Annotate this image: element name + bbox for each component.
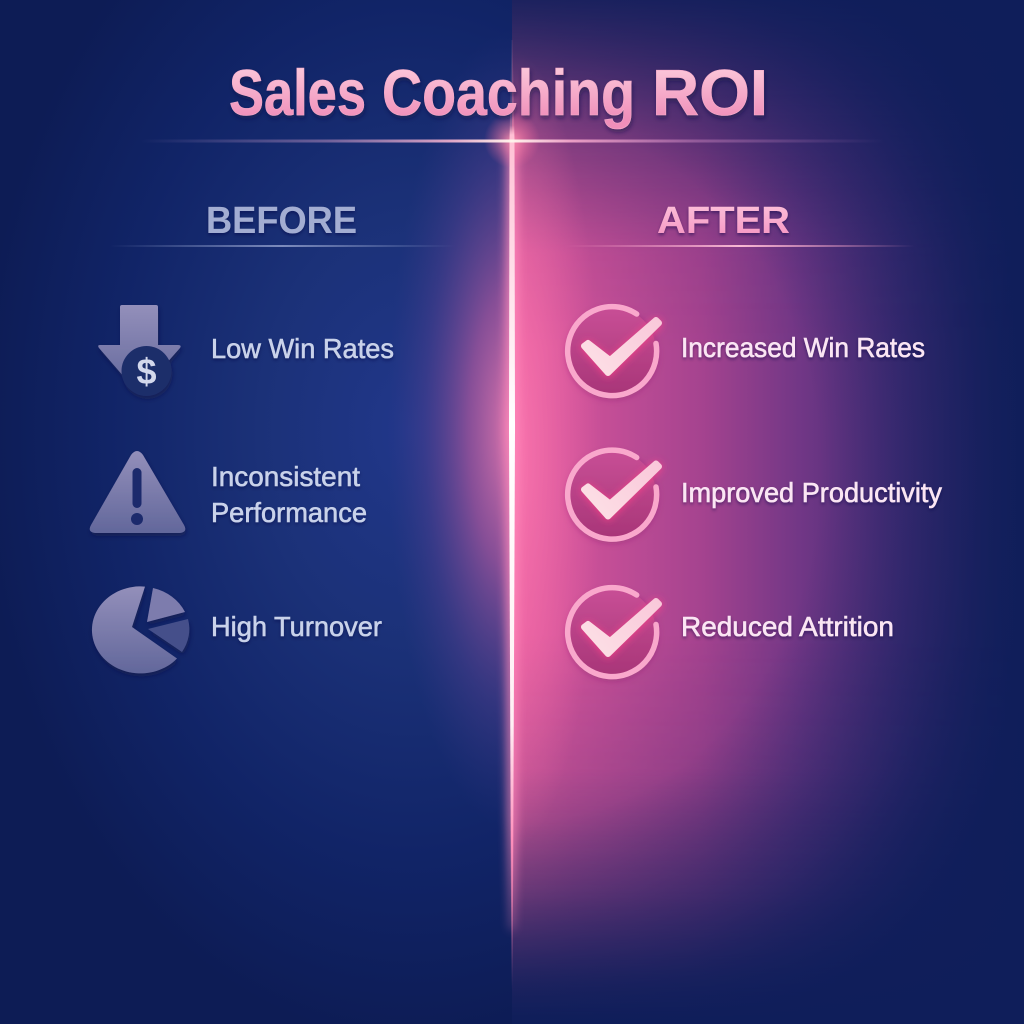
- icon: pie chart: [92, 586, 189, 673]
- label: reduced attrition: Reduced Attrition: [681, 611, 894, 642]
- central glowing divider: [484, 40, 540, 990]
- title: Coaching: [382, 56, 635, 129]
- label: improved productivity: Improved Productivity: [681, 477, 942, 508]
- icon: down arrow with dollar: $: [136, 351, 157, 392]
- before heading underline: [110, 245, 455, 247]
- icon: check 1: [568, 307, 659, 396]
- panel: before: [90, 200, 455, 673]
- icon: check 2: [568, 450, 659, 539]
- before heading: BEFORE: [206, 200, 357, 242]
- after heading underline: [565, 245, 915, 247]
- label: inconsistent performance: Performance: [211, 497, 367, 528]
- title: [229, 56, 768, 129]
- icon: down arrow with dollar: [98, 305, 181, 396]
- label: inconsistent performance: Inconsistent: [211, 461, 360, 492]
- icon: check 3: [568, 588, 659, 677]
- label: high turnover: High Turnover: [211, 611, 382, 642]
- title: Sales: [229, 56, 366, 129]
- title underline: [140, 140, 884, 142]
- title: ROI: [652, 56, 768, 129]
- label: increased win rates: Increased Win Rates: [681, 332, 925, 363]
- icon: warning triangle: [90, 451, 185, 533]
- label: inconsistent performance: [211, 461, 367, 528]
- panel: after: [565, 200, 942, 677]
- label: low win rates: Low Win Rates: [211, 333, 394, 364]
- after heading: AFTER: [657, 200, 790, 242]
